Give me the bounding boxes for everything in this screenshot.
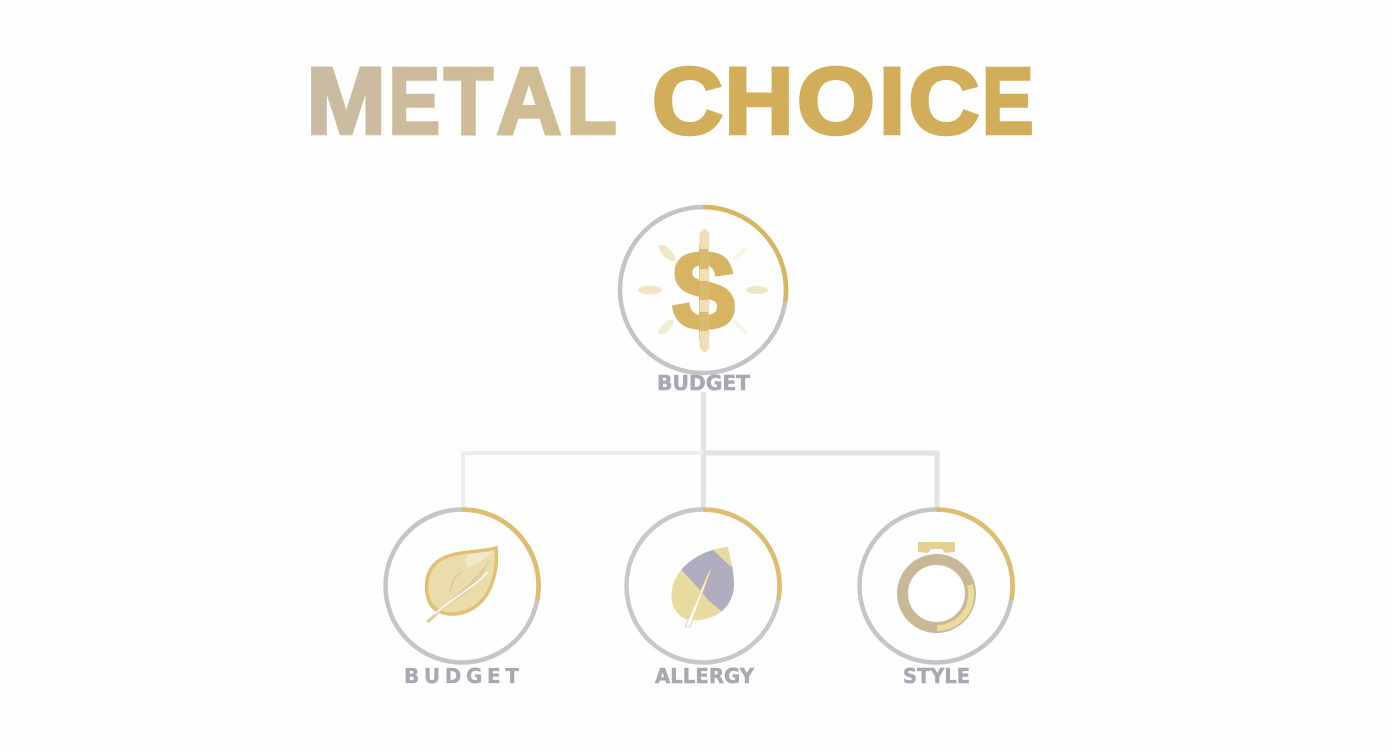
title word: Metal: E xyxy=(388,48,440,154)
icon: ring xyxy=(902,542,971,628)
icon: dollar sign with rays: $ xyxy=(672,228,735,353)
connector lines from root to child nodes xyxy=(463,392,937,510)
title word: Metal: L xyxy=(566,48,617,154)
icon: leaf xyxy=(426,548,497,623)
child label: ALLERGY xyxy=(655,664,754,688)
title word: Metal: T xyxy=(444,48,493,154)
child node: allergy xyxy=(626,509,780,688)
root ring xyxy=(620,207,786,373)
icon: dollar sign with rays xyxy=(638,228,768,353)
title word: Choice: H xyxy=(724,48,794,154)
child node: style xyxy=(860,509,1013,688)
icon: split leaf xyxy=(671,547,734,628)
child node: budget xyxy=(386,509,539,688)
root label: BUDGET xyxy=(657,371,750,395)
title word: Choice: C xyxy=(652,48,723,154)
root node: budget xyxy=(620,207,786,395)
child ring xyxy=(626,509,780,662)
child label: BUDGET xyxy=(404,664,519,688)
title word: Choice: I xyxy=(879,48,905,154)
title word: Metal: M xyxy=(306,48,386,154)
infographic canvas xyxy=(311,66,1032,684)
title word: Choice: E xyxy=(982,48,1034,154)
title word: Choice: O xyxy=(797,48,875,154)
child ring xyxy=(386,509,539,662)
title word: Choice: C xyxy=(908,48,980,154)
title: Metal Choice xyxy=(306,48,1034,154)
child ring xyxy=(860,509,1013,662)
child label: STYLE xyxy=(903,664,970,688)
title word: Metal: A xyxy=(496,48,562,154)
